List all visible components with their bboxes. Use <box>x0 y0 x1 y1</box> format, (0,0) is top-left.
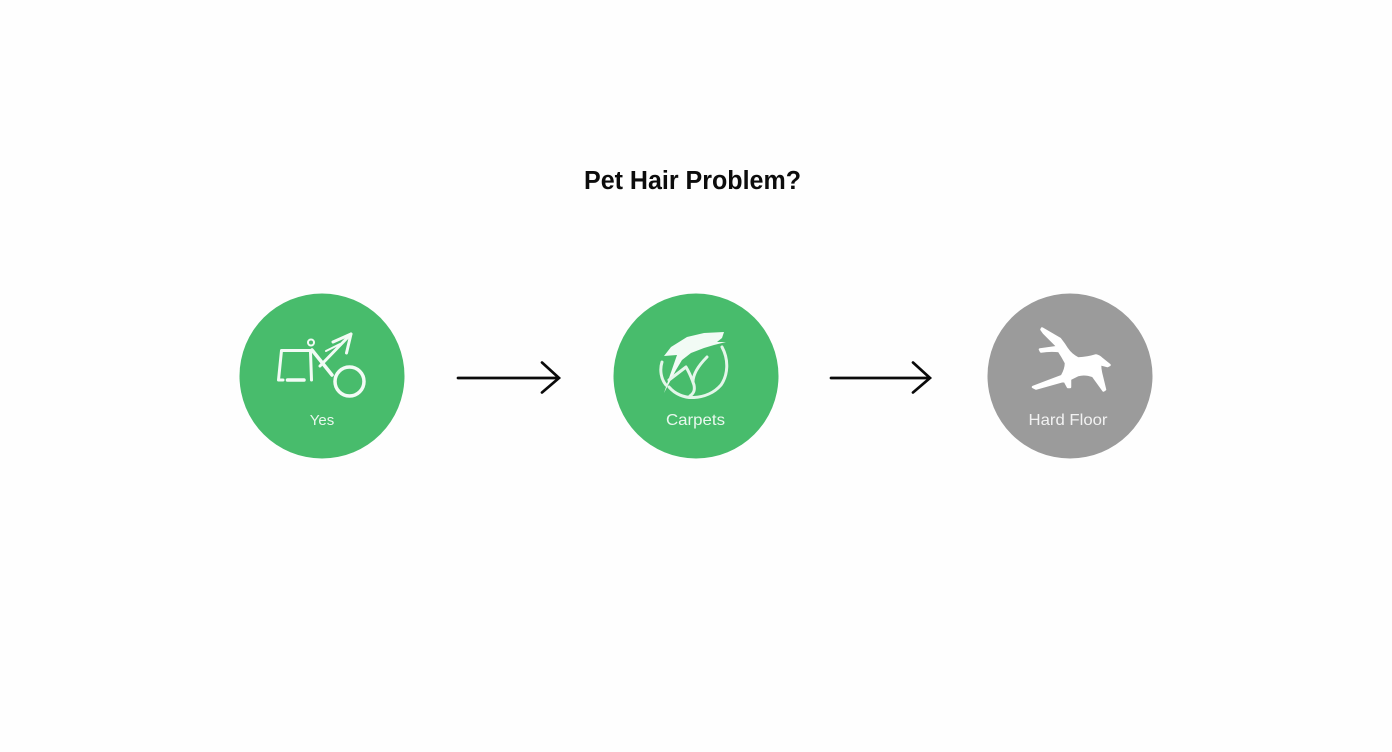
node: Carpets <box>614 294 778 458</box>
label: Yes: Yes <box>310 412 334 429</box>
green circle: Carpets <box>614 294 778 458</box>
title: Pet Hair Problem? <box>584 167 801 195</box>
icon: white pet silhouette <box>1033 328 1110 390</box>
gray circle: Hard Floor <box>988 294 1152 458</box>
node: Yes <box>240 294 404 458</box>
node: Hard Floor <box>988 294 1152 458</box>
icon: square, arrow and circle <box>278 334 364 396</box>
green circle: Yes <box>240 294 404 458</box>
arrow: Yes to Carpets <box>458 362 559 392</box>
arrow: Carpets to Hard Floor <box>831 362 930 392</box>
label: Carpets: Carpets <box>666 412 725 429</box>
label: Hard Floor: Hard Floor <box>1028 412 1108 429</box>
icon: stylised pet head with ring <box>661 332 727 398</box>
